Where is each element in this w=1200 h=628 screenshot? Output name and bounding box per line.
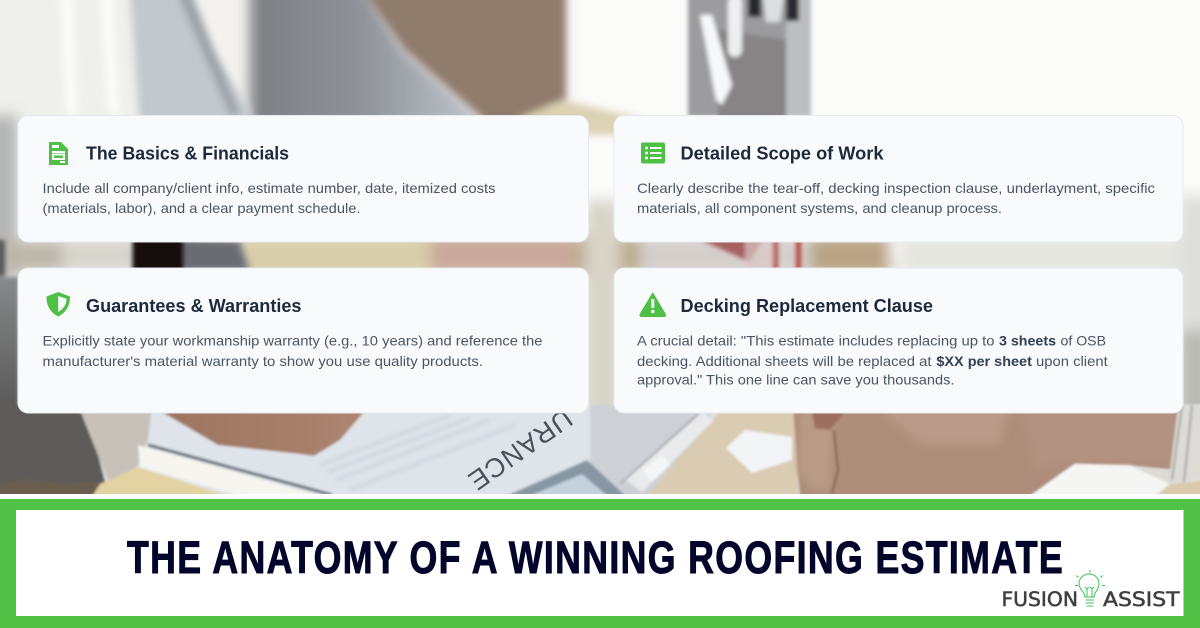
body text: scope: Clearly describe the tear-off, decking inspection clause, underlayment, specific [637, 180, 1155, 196]
logo: Fusion Assist: FUSION [1002, 588, 1078, 611]
body text: warranties [42, 332, 543, 369]
background photo: handshake over insurance paperwork [0, 0, 1200, 500]
icon: shield [46, 292, 70, 316]
lower photo band [0, 405, 1200, 500]
body text: warranties: manufacturer's material warranty to show you use quality products. [42, 353, 483, 369]
heading: The Basics & Financials: The Basics & Financials [86, 144, 289, 164]
title banner [0, 499, 1200, 628]
body text: decking clause [637, 332, 1108, 388]
panel: Detailed Scope of Work [614, 116, 1183, 242]
body text: decking clause: $XX per sheet [936, 353, 1032, 369]
panel: Guarantees & Warranties [18, 268, 588, 413]
icon: document [49, 142, 68, 165]
body text: scope [637, 180, 1155, 216]
icon: warning triangle [640, 293, 666, 316]
body text: basics [42, 180, 496, 216]
body text: basics: Include all company/client info, estimate number, date, itemized costs [42, 180, 496, 196]
title: THE ANATOMY OF A WINNING ROOFING ESTIMATE [127, 532, 1063, 583]
body text: warranties: Explicitly state your workmanship warranty (e.g., 10 years) and reference the [42, 332, 543, 348]
icon: list [641, 142, 665, 164]
pen cup [688, 0, 811, 120]
logo: Fusion Assist [1002, 570, 1180, 611]
body text: decking clause: upon client [1036, 353, 1108, 369]
body text: decking clause: approval." This one line can save you thousands. [637, 372, 954, 388]
body text: decking clause: 3 sheets [999, 332, 1056, 348]
heading: Decking Replacement Clause: Decking Replacement Clause [680, 296, 933, 316]
heading: Guarantees & Warranties: Guarantees & Warranties [86, 296, 302, 316]
body text: decking clause: A crucial detail: "This estimate includes replacing up to [637, 332, 995, 348]
body text: basics: (materials, labor), and a clear payment schedule. [42, 200, 360, 216]
heading: Detailed Scope of Work: Detailed Scope of Work [680, 144, 884, 164]
body text: scope: materials, all component systems, and cleanup process. [637, 200, 1002, 216]
logo: Fusion Assist: ASSIST [1103, 588, 1180, 611]
panel: Decking Replacement Clause [614, 268, 1183, 413]
body text: decking clause: of OSB [1060, 332, 1106, 348]
panel: The Basics & Financials [18, 116, 588, 242]
background photo: handshake over insurance paperwork: URANCE [462, 403, 578, 496]
icon: light bulb [1075, 570, 1105, 606]
body text: decking clause: decking. Additional sheets will be replaced at [637, 353, 932, 369]
